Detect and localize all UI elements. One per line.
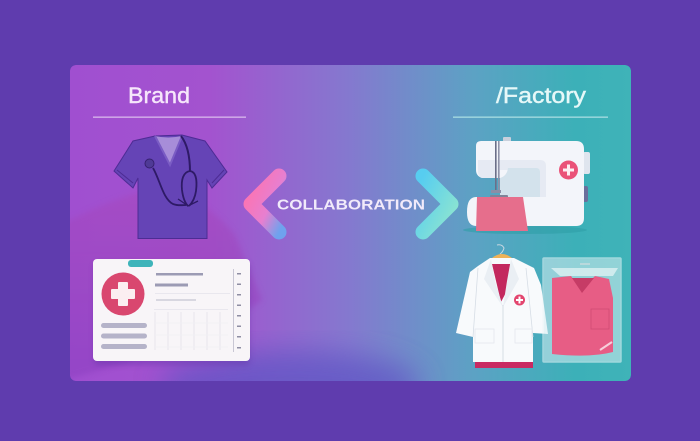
heading: Brand: Brand [128, 83, 190, 108]
icon: scrub top with stethoscope [114, 135, 227, 238]
text lines [101, 273, 203, 349]
icon: packaged scrubs in clear bag [543, 258, 621, 362]
panel: medical record card [93, 259, 250, 365]
icon: cross badge [559, 160, 578, 180]
tab [128, 260, 153, 267]
icon: sewing machine [463, 137, 590, 234]
fabric [476, 197, 528, 231]
label: collaboration: COLLABORATION [277, 196, 425, 214]
heading: Factory: /Factory [496, 83, 586, 108]
icon: lab coat [456, 245, 548, 368]
icon: right chevron arrow [423, 176, 451, 232]
divider: Brand [93, 116, 246, 118]
side ticks [237, 273, 241, 348]
icon: left chevron arrow [251, 176, 279, 232]
icon: red cross badge [102, 272, 144, 316]
table [154, 269, 234, 352]
panel: collaboration [70, 65, 631, 381]
divider: Factory [453, 116, 608, 118]
